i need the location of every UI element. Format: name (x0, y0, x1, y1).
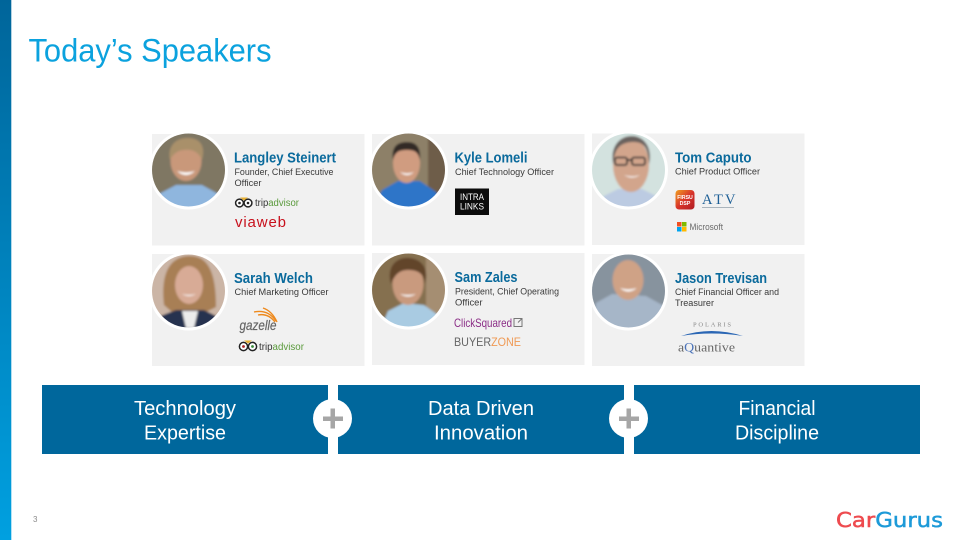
job title: Chief Financial Officer and (675, 287, 779, 298)
logo: Microsoft: Microsoft (690, 222, 723, 232)
photo: Kyle Lomeli (369, 130, 448, 210)
icon: plus connector 1 (313, 399, 352, 438)
logo: tripadvisor (239, 340, 304, 353)
banner: Data Driven Innovation: Innovation (434, 422, 528, 444)
logo: Microsoft (677, 222, 723, 232)
panel: Sam Zales (369, 250, 584, 365)
logo: BuyerZone: BUYERZONE (454, 335, 521, 349)
logo: tripadvisor (236, 198, 300, 209)
logo: ATV: ATV (702, 192, 736, 208)
logo: First DSP: FIRSU (677, 195, 693, 201)
logo: tripadvisor: tripadvisor (259, 341, 304, 353)
logo: Polaris: POLARIS (693, 322, 731, 328)
banner: Technology Expertise: Technology (134, 397, 237, 420)
banner: Financial Discipline (634, 385, 920, 454)
name: Langley Steinert (234, 150, 336, 166)
icon: plus connector 2 (609, 399, 648, 438)
photo: Langley Steinert (149, 130, 228, 210)
job title: Founder, Chief Executive (234, 167, 334, 178)
photo: Sam Zales (369, 250, 448, 330)
title: Today’s Speakers (28, 32, 272, 68)
logo: ClickSquared: ClickSquared (454, 316, 512, 330)
logo: Polaris (681, 322, 743, 336)
job title: Chief Product Officer (675, 166, 761, 178)
job title: Treasurer (675, 298, 715, 309)
logo: CarGurus: CarGurus (836, 508, 943, 532)
name: Sarah Welch (234, 271, 313, 287)
panel: Jason Trevisan (589, 252, 804, 366)
panel: Sarah Welch (149, 252, 364, 366)
banner: Data Driven Innovation: Data Driven (428, 397, 534, 420)
panel: Tom Caputo (589, 130, 804, 245)
name: Jason Trevisan (675, 271, 767, 287)
name: Sam Zales (454, 270, 518, 286)
job title: President, Chief Operating (455, 286, 559, 298)
banner: Financial Discipline: Financial (738, 397, 816, 420)
job title: Chief Marketing Officer (234, 287, 329, 298)
photo: Jason Trevisan (589, 252, 668, 331)
banner: Data Driven Innovation (338, 385, 624, 454)
panel: Kyle Lomeli (369, 130, 584, 246)
job title: Officer (234, 178, 262, 189)
logo: tripadvisor: tripadvisor (255, 198, 300, 209)
panel: Langley Steinert (149, 130, 364, 246)
banner: Technology Expertise (42, 385, 328, 454)
logo: First DSP (676, 190, 694, 210)
job title: Officer (455, 298, 483, 308)
photo: Tom Caputo (589, 130, 668, 210)
logo: Intralinks: INTRA (460, 192, 485, 203)
banner: Financial Discipline: Discipline (735, 422, 819, 444)
logo: gazelle: gazelle (240, 317, 277, 333)
logo: Intralinks: LINKS (460, 202, 484, 212)
logo: gazelle (240, 308, 277, 333)
logo: aQuantive: aQuantive (678, 340, 735, 354)
job title: Chief Technology Officer (455, 167, 555, 178)
logo: Intralinks (455, 188, 489, 215)
banner: Technology Expertise: Expertise (144, 422, 226, 444)
left gradient side bar (0, 0, 11, 540)
name: Kyle Lomeli (454, 150, 528, 166)
logo: First DSP: DSP (680, 201, 691, 207)
logo: viaweb: viaweb (235, 214, 286, 231)
name: Tom Caputo (675, 150, 752, 166)
photo: Sarah Welch (149, 252, 228, 331)
page number: 3 (33, 515, 38, 524)
